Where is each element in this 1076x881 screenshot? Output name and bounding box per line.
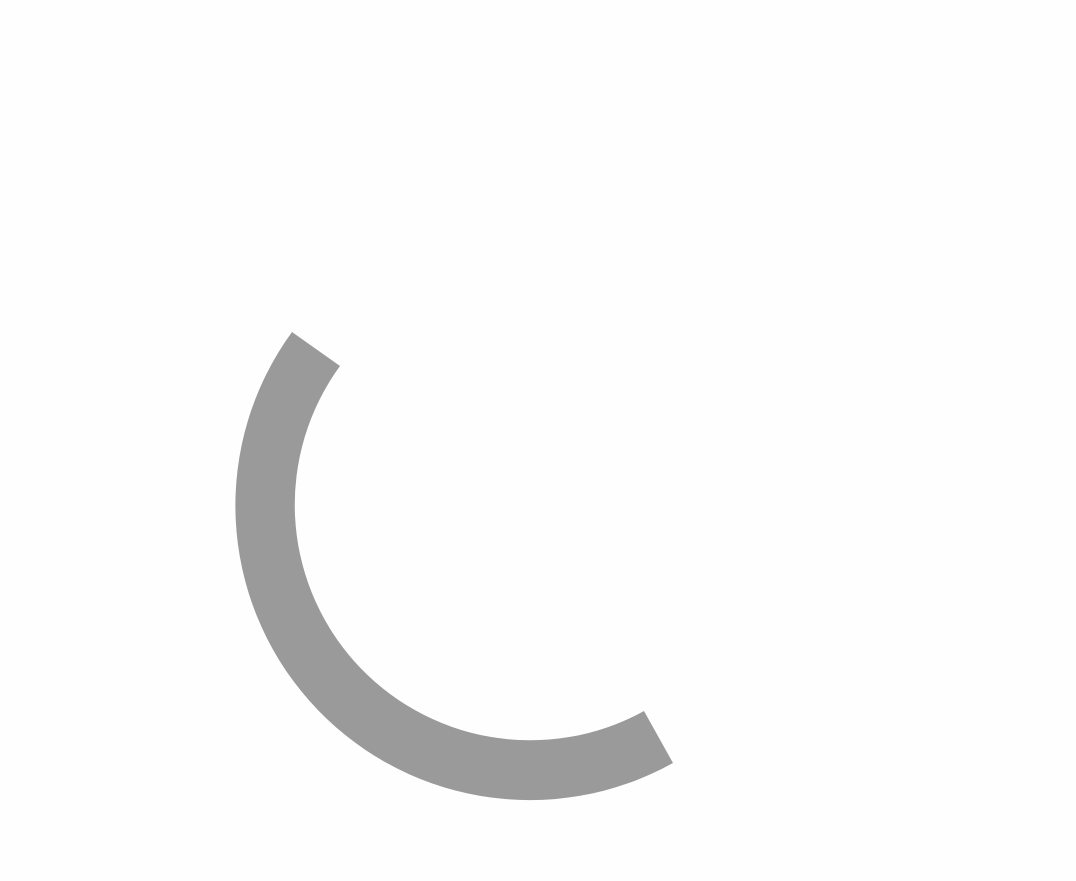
gray arc segment	[235, 332, 673, 800]
